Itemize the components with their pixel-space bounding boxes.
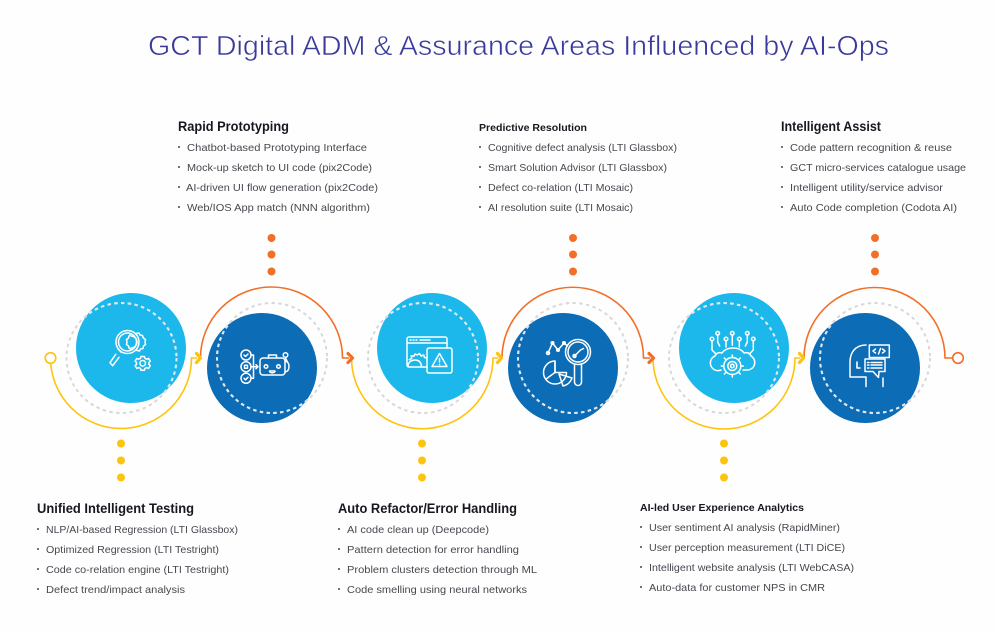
list: intelligent assist items: GCT micro-services catalogue usage	[790, 162, 966, 174]
list: rapid prototyping items: AI-driven UI flow generation (pix2Code)	[186, 182, 378, 194]
list: auto refactor items	[338, 524, 537, 596]
list: rapid prototyping items: Mock-up sketch to UI code (pix2Code)	[187, 162, 372, 174]
yellow connector dots: user experience analytics	[720, 440, 728, 482]
orange connector dots: predictive resolution	[569, 234, 577, 276]
list: auto refactor items: Code smelling using neural networks	[347, 584, 527, 596]
end node	[953, 353, 963, 363]
heading: auto refactor error handling: Auto Refactor/Error Handling	[338, 501, 517, 516]
list: user experience items: Auto-data for customer NPS in CMR	[649, 582, 825, 594]
list: user experience items: User sentiment AI analysis (RapidMiner)	[649, 522, 840, 534]
icon: analytics magnifier and pie	[544, 340, 590, 386]
orange connector dots: rapid prototyping	[268, 234, 276, 276]
list: predictive resolution items: Smart Solution Advisor (LTI Glassbox)	[488, 162, 667, 174]
heading: AI-led user experience analytics: AI-led User Experience Analytics	[640, 502, 804, 514]
panel: auto refactor error handling	[338, 501, 537, 596]
list: auto refactor items: Problem clusters detection through ML	[347, 564, 537, 576]
list: user experience items: User perception measurement (LTI DiCE)	[649, 542, 845, 554]
step 3 circle: auto refactor	[377, 293, 487, 403]
list: unified intelligent testing items: Optimized Regression (LTI Testright)	[46, 544, 219, 556]
list: user experience items: Intelligent website analysis (LTI WebCASA)	[649, 562, 854, 574]
icon: head with code and list bubbles	[850, 345, 889, 386]
yellow connector dots: auto refactor	[418, 440, 426, 482]
icon: checklist and robot	[241, 350, 289, 383]
list: unified intelligent testing items: NLP/AI-based Regression (LTI Glassbox)	[46, 524, 238, 536]
orange connector dots: intelligent assist	[871, 234, 879, 276]
step 2 circle: rapid prototyping	[207, 313, 317, 423]
list: intelligent assist items	[781, 142, 966, 214]
list: predictive resolution items: Defect co-relation (LTI Mosaic)	[488, 182, 633, 194]
list: auto refactor items: Pattern detection for error handling	[347, 544, 519, 556]
list: intelligent assist items: Code pattern recognition & reuse	[790, 142, 952, 154]
icon: cloud brain with circuit nodes	[710, 332, 755, 377]
list: predictive resolution items	[479, 142, 677, 214]
list: unified intelligent testing items: Code co-relation engine (LTI Testright)	[46, 564, 229, 576]
list: rapid prototyping items: Chatbot-based Prototyping Interface	[187, 142, 367, 154]
list: user experience items	[640, 522, 854, 594]
list: predictive resolution items: AI resolution suite (LTI Mosaic)	[488, 202, 633, 214]
step 6 circle: intelligent assist	[810, 313, 920, 423]
yellow connector dots: unified intelligent testing	[117, 440, 125, 482]
dashed rings	[66, 303, 930, 413]
heading: rapid prototyping: Rapid Prototyping	[178, 119, 289, 134]
step 1 circle: unified intelligent testing	[76, 293, 186, 403]
title: GCT Digital ADM & Assurance Areas Influenced by AI-Ops	[148, 30, 889, 61]
yellow arcs	[50, 358, 800, 429]
heading: intelligent assist: Intelligent Assist	[781, 119, 881, 134]
list: predictive resolution items: Cognitive defect analysis (LTI Glassbox)	[488, 142, 677, 154]
list: intelligent assist items: Auto Code completion (Codota AI)	[790, 202, 957, 214]
panel: predictive resolution	[479, 122, 677, 214]
heading: unified intelligent testing: Unified Intelligent Testing	[37, 501, 194, 516]
list: rapid prototyping items: Web/IOS App match (NNN algorithm)	[187, 202, 370, 214]
panel: unified intelligent testing	[37, 501, 238, 596]
list: unified intelligent testing items: Defect trend/impact analysis	[46, 584, 185, 596]
arrowheads	[196, 354, 804, 362]
panel: AI-led user experience analytics	[640, 502, 854, 594]
list: rapid prototyping items	[178, 142, 378, 214]
list: unified intelligent testing items	[37, 524, 238, 596]
list: intelligent assist items: Intelligent utility/service advisor	[790, 182, 944, 194]
step 4 circle: predictive resolution	[508, 313, 618, 423]
start node	[45, 353, 56, 363]
icon: window with warning	[407, 337, 452, 373]
panel: rapid prototyping	[178, 119, 378, 214]
step 5 circle: user experience analytics	[679, 293, 789, 403]
heading: predictive resolution: Predictive Resolution	[479, 122, 587, 134]
list: auto refactor items: AI code clean up (Deepcode)	[347, 524, 489, 536]
icon: magnifier and gears	[110, 330, 150, 370]
orange arcs	[200, 287, 952, 358]
panel: intelligent assist	[781, 119, 966, 214]
